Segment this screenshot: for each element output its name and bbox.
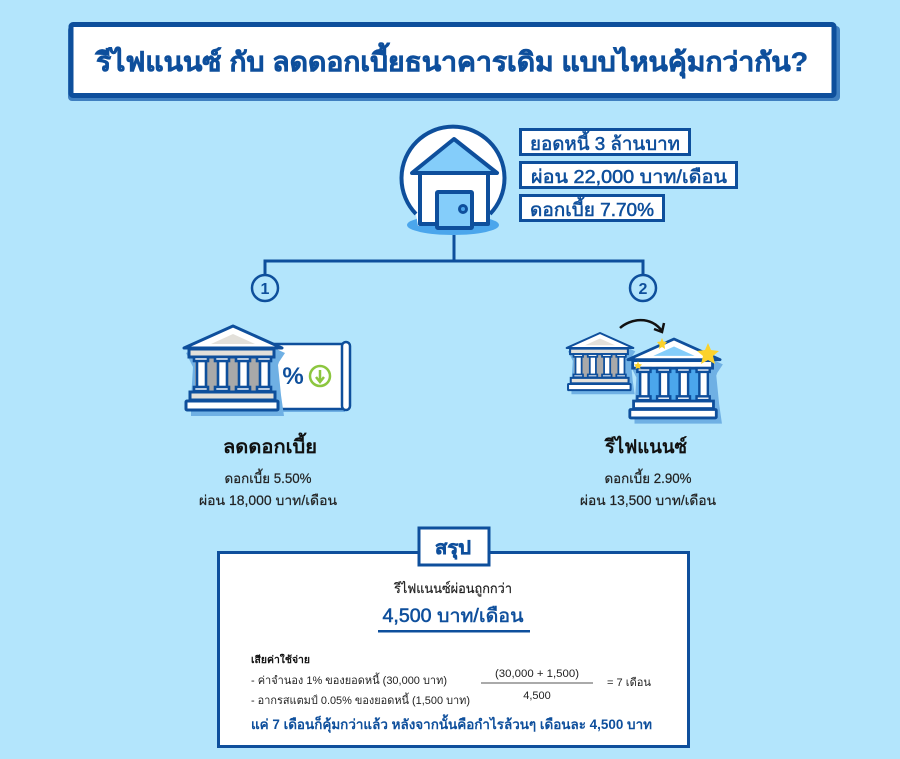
option 1: reduce interest: ผ่อน 18,000 บาท/เดือน [199, 493, 337, 508]
option 2: refinance: ดอกเบี้ย 2.90% [604, 468, 692, 486]
badge: 1 [252, 275, 278, 301]
badge: 2 [630, 275, 656, 301]
saving headline: รีไฟแนนซ์ผ่อนถูกกว่า [393, 580, 512, 597]
icon: house [402, 127, 504, 235]
fact: monthly payment: ผ่อน 22,000 บาท/เดือน [531, 166, 727, 187]
cost list: - ค่าจำนอง 1% ของยอดหนี้ (30,000 บาท) [251, 672, 447, 687]
title banner [68, 24, 840, 101]
option 2: refinance: รีไฟแนนซ์ [604, 435, 687, 458]
panel: summary [218, 528, 688, 746]
option 1: reduce interest: ดอกเบี้ย 5.50% [224, 468, 312, 486]
payback formula: 4,500 [523, 690, 551, 702]
cost list [251, 653, 470, 707]
badge: 2: 2 [639, 281, 648, 298]
payback formula [481, 668, 651, 702]
cost list: เสียค่าใช้จ่าย [251, 653, 310, 666]
icon: moving from old bank to new bank [567, 320, 723, 424]
badge: 1: 1 [261, 281, 270, 298]
fact: interest rate: ดอกเบี้ย 7.70% [530, 196, 654, 220]
summary tab: สรุป [435, 538, 471, 560]
cost list: - อากรสแตมป์ 0.05% ของยอดหนี้ (1,500 บาท) [251, 692, 470, 707]
saving headline [378, 580, 530, 632]
icon: bank with lower interest scroll [184, 326, 350, 416]
saving headline: 4,500 บาท/เดือน [382, 606, 524, 627]
payback formula: (30,000 + 1,500) [495, 668, 579, 680]
payback formula: = 7 เดือน [607, 676, 651, 689]
icon: bank with lower interest scroll: % [282, 363, 304, 390]
title banner: รีไฟแนนซ์ กับ ลดดอกเบี้ยธนาคารเดิม แบบไหนคุ้มกว่ากัน? [94, 42, 808, 79]
option 2: refinance: ผ่อน 13,500 บาท/เดือน [580, 493, 716, 508]
option 1: reduce interest: ลดดอกเบี้ย [223, 432, 317, 458]
connector lines [265, 235, 643, 275]
conclusion: แค่ 7 เดือนก็คุ้มกว่าแล้ว หลังจากนั้นคือกำไรล้วนๆ เดือนละ 4,500 บาท [251, 714, 652, 733]
option 2: refinance [580, 435, 716, 508]
option 1: reduce interest [199, 432, 337, 508]
fact: debt balance: ยอดหนี้ 3 ล้านบาท [530, 130, 680, 154]
summary tab [419, 528, 489, 565]
